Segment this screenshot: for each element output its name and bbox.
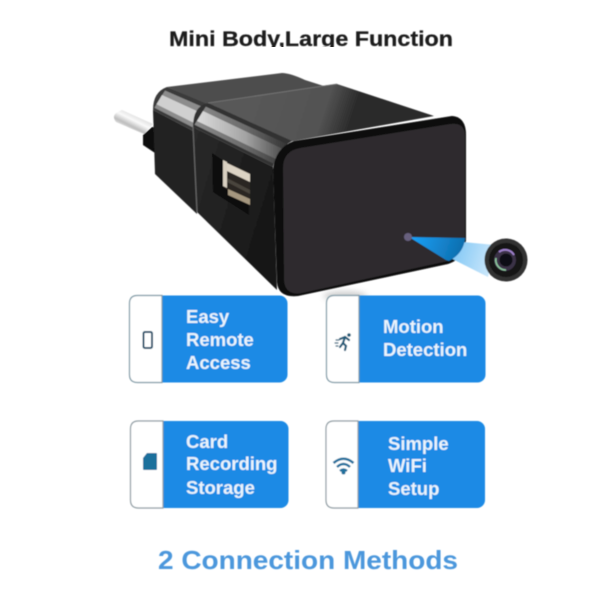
panel: simple wifi setup [326,421,485,508]
text: simple wifi setup: Setup [388,478,439,499]
panel: easy remote access [130,296,288,382]
panel: card recording storage [130,421,288,508]
camera face [283,124,465,293]
text: simple wifi setup: WiFi [388,455,427,476]
text: card recording storage: Card [186,431,228,452]
text: easy remote access: Access [186,352,251,373]
rear body [153,73,330,214]
icon: phone [144,332,152,348]
text: motion detection: Motion [383,316,444,337]
panel: motion card shadow [323,291,367,301]
panel: motion detection [326,296,486,382]
icon: plug prong [114,110,158,154]
usb port [212,153,250,215]
title: Mini Body,Large Function [169,27,453,51]
text: simple wifi setup: Simple [388,433,449,454]
icon: memory card [143,453,157,470]
text: easy remote access: Remote [186,329,254,350]
text: card recording storage: Storage [186,477,255,498]
text: easy remote access: Easy [186,306,230,327]
icon: wifi [334,459,354,473]
light beam [409,237,495,277]
text: card recording storage: Recording [186,453,277,474]
footer heading: 2 Connection Methods [158,545,458,575]
text: motion detection: Detection [383,339,467,360]
lens dot [404,233,412,241]
icon: running figure [335,333,351,350]
icon: camera lens [484,238,528,282]
front body [193,84,466,296]
product: camera charger [114,73,528,296]
